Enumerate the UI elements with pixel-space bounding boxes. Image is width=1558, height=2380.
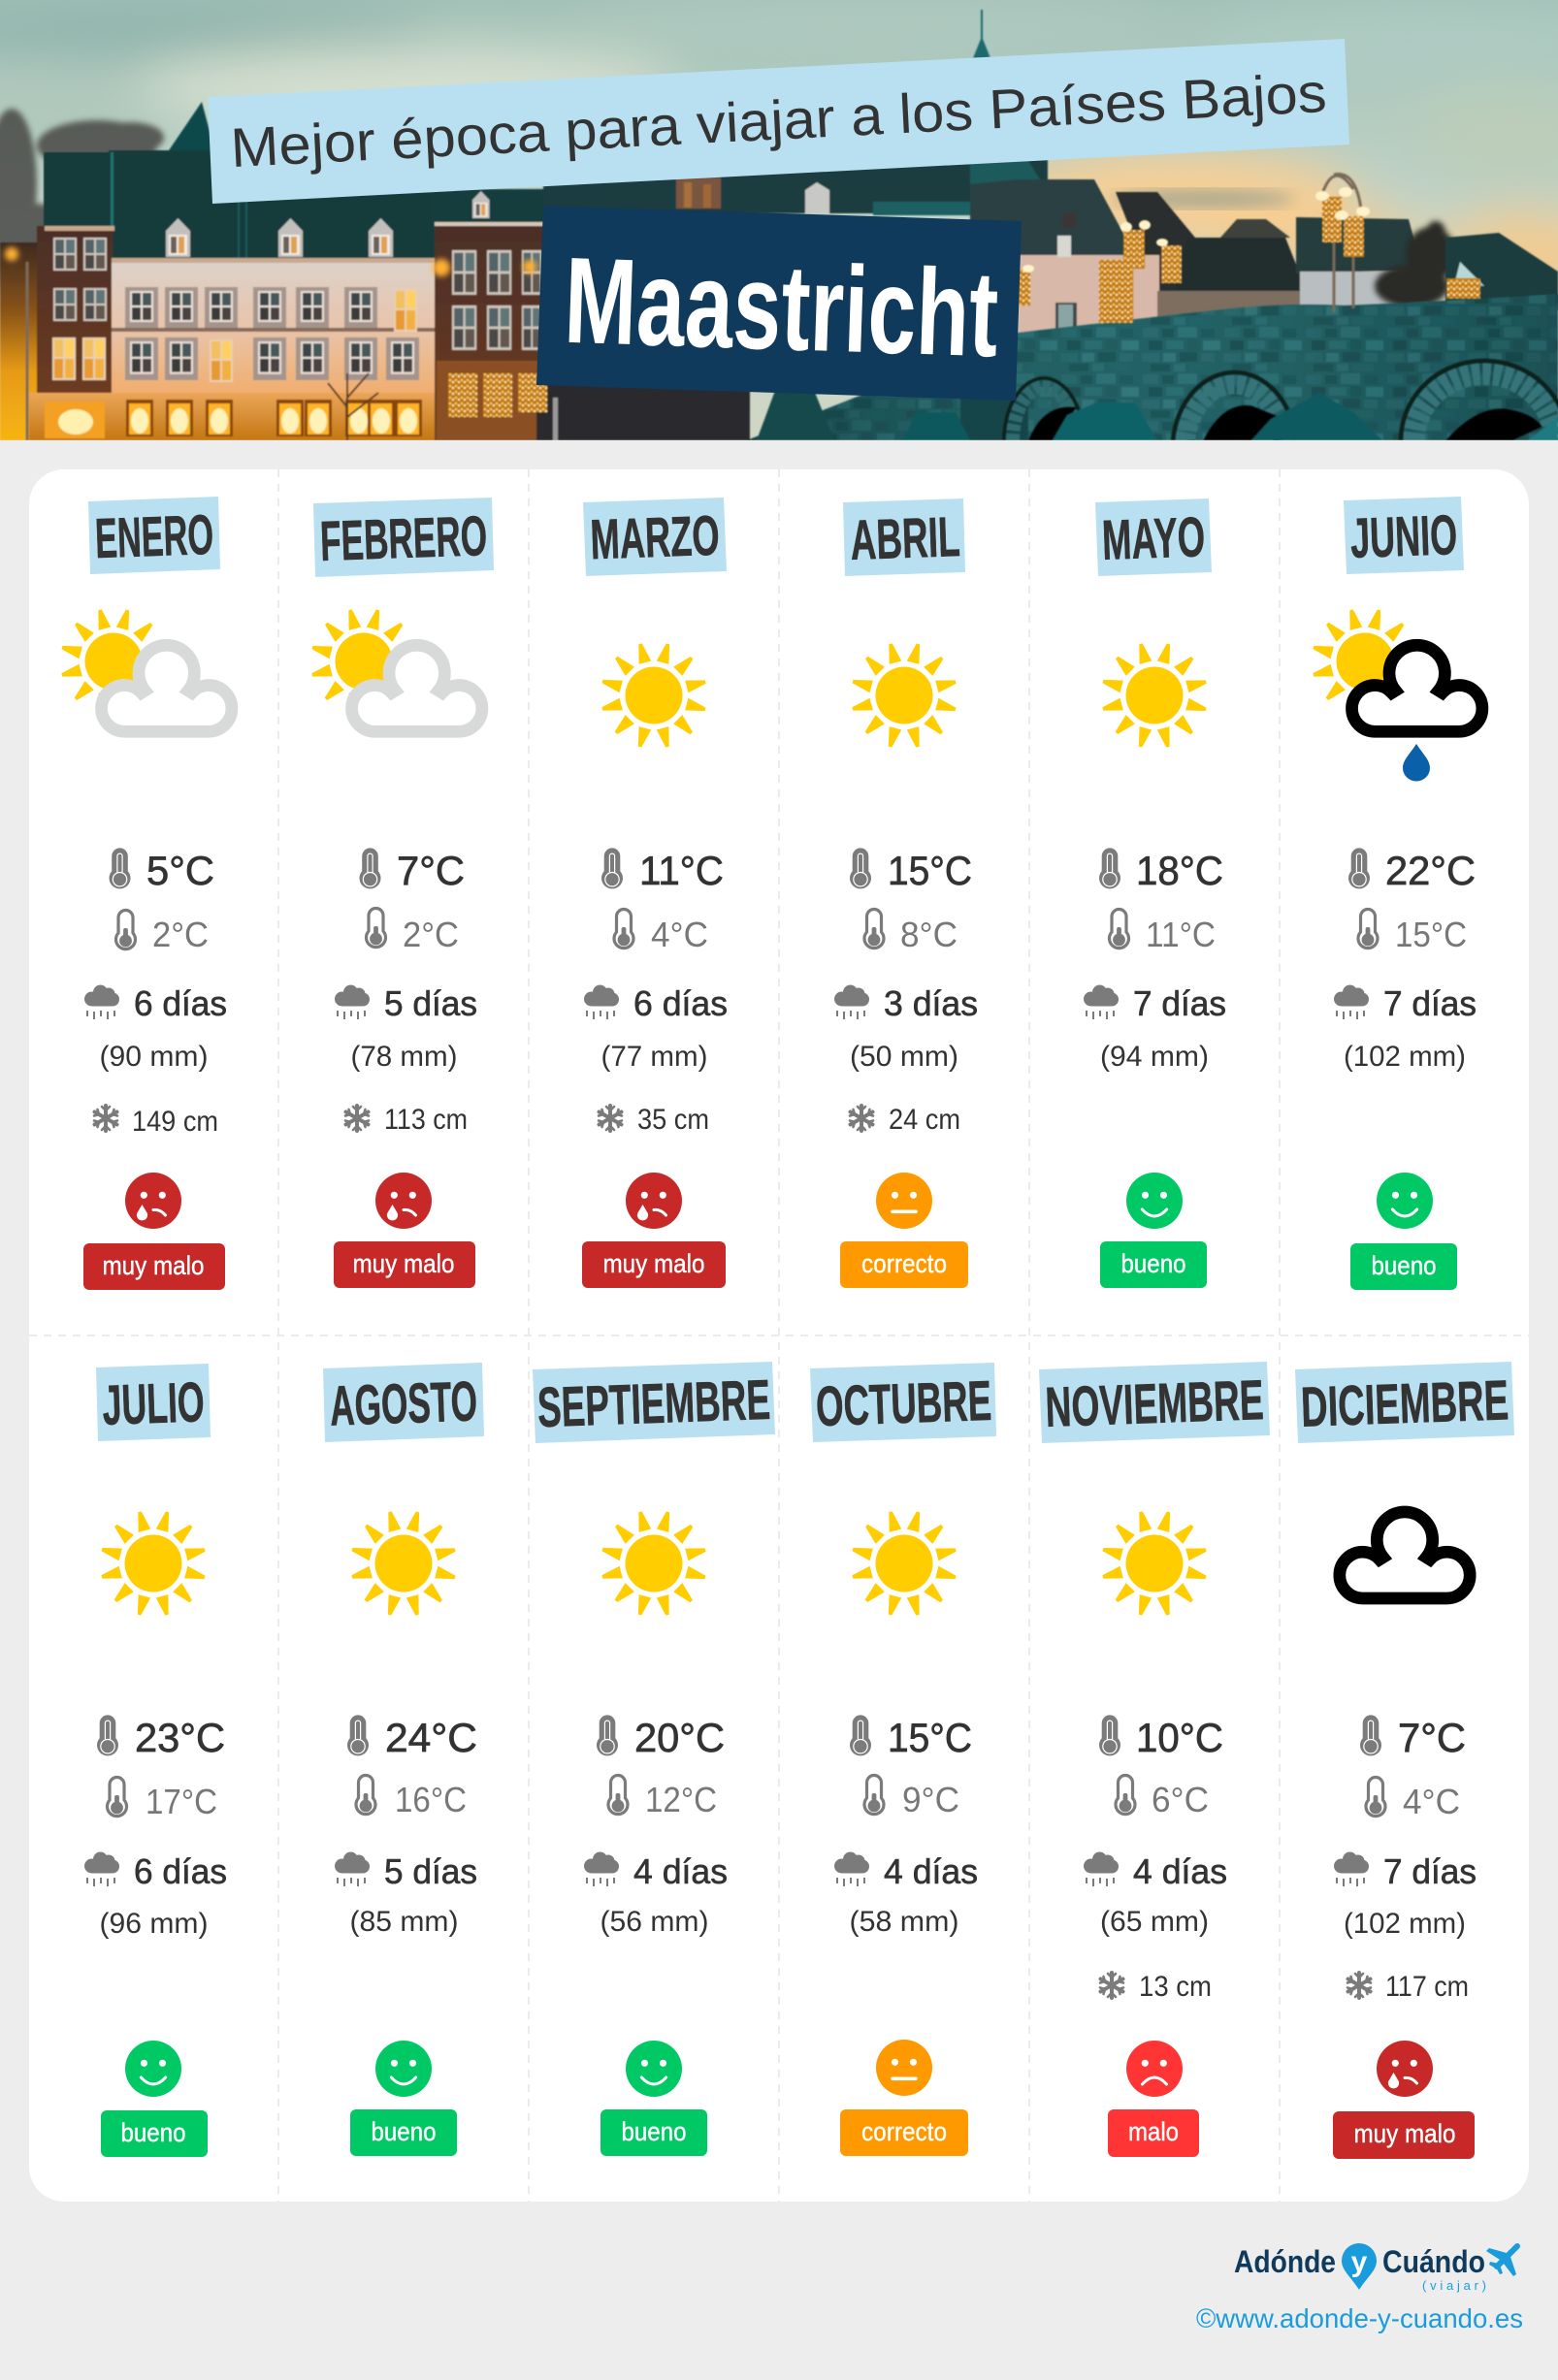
rating: bueno: bueno <box>1121 1249 1185 1278</box>
snow depth: 117 cm <box>1385 1971 1469 2003</box>
low temperature <box>1366 1777 1460 1821</box>
low temperature <box>608 1775 717 1819</box>
rainy days <box>1334 1851 1477 1891</box>
snow depth <box>345 1104 468 1136</box>
low temperature: 17°C <box>146 1782 217 1821</box>
rainfall: (78 mm) <box>351 1041 458 1073</box>
low temperature: 6°C <box>1152 1780 1209 1819</box>
month label: marzo: MARZO <box>589 504 721 571</box>
low temperature: 4°C <box>651 915 708 954</box>
logo: Adónde y Cuándo: (viajar) <box>1422 2278 1486 2293</box>
rainfall: (96 mm) <box>99 1908 208 1940</box>
rating: bueno <box>1350 1173 1457 1290</box>
high temperature <box>1360 1715 1466 1760</box>
panel: enero <box>60 497 232 1290</box>
rainy days: 5 días <box>384 1851 477 1891</box>
logo: Adónde y Cuándo: Cuándo <box>1382 2244 1485 2279</box>
high temperature <box>1099 848 1223 893</box>
low temperature: 8°C <box>900 915 958 954</box>
month label: junio: JUNIO <box>1349 503 1458 570</box>
icon: sun, black cloud and raindrop <box>1312 608 1482 782</box>
month label: febrero <box>313 498 494 577</box>
rainfall: (102 mm) <box>1344 1041 1466 1073</box>
rainfall: (94 mm) <box>1100 1041 1209 1073</box>
panel: noviembre <box>1039 1362 1270 2157</box>
rating: muy malo: muy malo <box>103 1251 204 1280</box>
tree <box>0 105 168 288</box>
rainfall: (77 mm) <box>601 1041 708 1073</box>
high temperature <box>601 848 724 893</box>
rainy days: 4 días <box>884 1851 978 1891</box>
rainfall: (85 mm) <box>349 1906 458 1938</box>
rainy days <box>584 983 728 1023</box>
rainy days: 3 días <box>884 983 978 1023</box>
high temperature: 23°C <box>135 1715 225 1760</box>
low temperature <box>116 910 209 954</box>
logo: Adónde y Cuándo: Adónde <box>1234 2244 1336 2279</box>
icon: sun <box>600 1510 707 1617</box>
month label: mayo <box>1095 499 1212 576</box>
low temperature <box>1358 910 1467 954</box>
rating: muy malo: muy malo <box>603 1249 704 1278</box>
icon: sun and grey cloud <box>310 608 482 731</box>
high temperature: 11°C <box>639 848 724 893</box>
rainy days: 6 días <box>134 1851 227 1891</box>
month label: octubre <box>810 1363 996 1442</box>
rainy days <box>834 1851 978 1891</box>
rainy days: 7 días <box>1133 983 1226 1023</box>
snow depth <box>1347 1971 1469 2003</box>
rating: muy malo <box>334 1173 475 1288</box>
panel: mayo <box>1084 499 1226 1288</box>
panel: julio <box>84 1364 227 2157</box>
rating: bueno <box>600 2041 707 2156</box>
month label: junio <box>1344 497 1464 574</box>
panel: febrero <box>310 498 494 1288</box>
rating: bueno <box>1100 1173 1207 1288</box>
low temperature <box>1116 1775 1209 1819</box>
low temperature: 16°C <box>395 1780 467 1819</box>
panel: calendar card <box>29 469 1529 2202</box>
month label: abril: ABRIL <box>849 505 961 572</box>
icon: airplane <box>1486 2246 1517 2276</box>
month label: julio: JULIO <box>101 1370 206 1437</box>
subtitle banner <box>208 39 1349 204</box>
rating: bueno <box>101 2041 208 2157</box>
rating: correcto: correcto <box>861 1249 947 1278</box>
logo: Adónde y Cuándo <box>1234 2243 1517 2293</box>
rating: bueno <box>350 2041 457 2156</box>
rainfall: (50 mm) <box>850 1041 958 1073</box>
rating: muy malo: muy malo <box>353 1249 454 1278</box>
low temperature: 12°C <box>645 1780 717 1819</box>
low temperature: 9°C <box>902 1780 959 1819</box>
rainy days: 6 días <box>633 983 728 1023</box>
snow depth: 13 cm <box>1139 1971 1212 2003</box>
rating: bueno: bueno <box>1372 1251 1436 1280</box>
high temperature: 24°C <box>385 1715 477 1760</box>
snow depth <box>1100 1971 1212 2003</box>
distant spire <box>973 10 990 58</box>
month label: octubre: OCTUBRE <box>815 1369 992 1438</box>
high temperature <box>1099 1715 1223 1760</box>
rainy days <box>1084 1851 1227 1891</box>
rating: bueno: bueno <box>120 2118 186 2147</box>
snow depth <box>599 1104 709 1136</box>
rainy days: 6 días <box>134 983 227 1023</box>
title: Maastricht: Maastricht <box>563 232 1000 382</box>
rainy days: 5 días <box>384 983 477 1023</box>
high temperature: 7°C <box>397 848 465 893</box>
high temperature <box>850 1715 972 1760</box>
rating: correcto: correcto <box>861 2117 947 2146</box>
month label: agosto: AGOSTO <box>329 1369 478 1438</box>
rainy days <box>834 983 978 1023</box>
low temperature: 2°C <box>152 915 209 954</box>
rainy days: 7 días <box>1383 983 1477 1023</box>
rainy days <box>335 983 477 1023</box>
rainfall: (90 mm) <box>99 1041 208 1073</box>
snow depth <box>850 1104 960 1136</box>
high temperature <box>850 848 972 893</box>
rainy days <box>84 1851 227 1891</box>
panel: octubre <box>810 1363 996 2156</box>
panel: junio <box>1312 497 1482 1290</box>
icon: sun and grey cloud <box>60 608 232 731</box>
title: Maastricht <box>536 206 1022 401</box>
low temperature <box>864 1775 959 1819</box>
icon: sun <box>100 1510 207 1617</box>
month label: septiembre <box>533 1362 775 1443</box>
panel: septiembre <box>533 1362 775 2156</box>
high temperature <box>109 848 214 893</box>
month label: abril <box>843 499 965 576</box>
bridge <box>747 294 1558 440</box>
rainy days <box>84 983 227 1023</box>
high temperature: 15°C <box>888 1715 972 1760</box>
month label: febrero: FEBRERO <box>319 504 488 573</box>
panel: agosto <box>323 1363 484 2156</box>
rating: muy malo <box>582 1173 726 1288</box>
month label: mayo: MAYO <box>1101 505 1206 572</box>
header photo: Maastricht at dusk <box>0 0 1558 440</box>
rating: bueno: bueno <box>621 2117 687 2146</box>
rating: muy malo: muy malo <box>1354 2119 1455 2148</box>
low temperature: 2°C <box>403 915 459 954</box>
rainfall: (58 mm) <box>850 1906 958 1938</box>
rating: muy malo <box>83 1173 225 1290</box>
low temperature <box>864 910 958 954</box>
low temperature: 11°C <box>1146 915 1216 954</box>
month label: enero <box>88 497 220 574</box>
icon: sun <box>1101 1510 1208 1617</box>
rating: malo: malo <box>1128 2117 1179 2146</box>
low temperature <box>356 1775 467 1819</box>
rating: bueno: bueno <box>371 2117 437 2146</box>
high temperature: 15°C <box>888 848 972 893</box>
high temperature: 18°C <box>1136 848 1223 893</box>
panel: diciembre <box>1295 1362 1514 2159</box>
icon: sun <box>600 642 707 749</box>
rainy days <box>1334 983 1477 1023</box>
month label: noviembre: NOVIEMBRE <box>1044 1368 1265 1439</box>
high temperature <box>359 848 465 893</box>
low temperature: 15°C <box>1395 915 1467 954</box>
website url: ©www.adonde-y-cuando.es <box>1196 2303 1523 2333</box>
low temperature <box>614 910 708 954</box>
icon: sun <box>350 1510 457 1617</box>
rainy days: 7 días <box>1383 1851 1477 1891</box>
month label: marzo <box>583 498 727 576</box>
month label: noviembre <box>1039 1362 1270 1443</box>
month label: enero: ENERO <box>94 503 214 570</box>
rating: correcto <box>840 1173 968 1288</box>
right houses <box>969 178 1124 256</box>
rainfall: (102 mm) <box>1344 1908 1466 1940</box>
lamp posts and string lights <box>1019 175 1480 323</box>
icon: map pin <box>1342 2243 1377 2290</box>
icon: sun <box>1101 642 1208 749</box>
high temperature: 10°C <box>1136 1715 1223 1760</box>
subtitle banner: Mejor época para viajar a los Países Bajos <box>229 62 1328 179</box>
rainy days: 4 días <box>1133 1851 1227 1891</box>
low temperature <box>107 1777 217 1821</box>
icon: map pin: y <box>1351 2246 1368 2278</box>
month label: septiembre: SEPTIEMBRE <box>536 1368 771 1439</box>
month label: agosto <box>323 1363 484 1442</box>
month label: julio <box>96 1364 211 1441</box>
rainfall: (65 mm) <box>1100 1906 1209 1938</box>
high temperature: 20°C <box>634 1715 725 1760</box>
snow depth: 24 cm <box>889 1104 960 1136</box>
rating: correcto <box>840 2040 968 2156</box>
snow depth: 113 cm <box>384 1104 468 1136</box>
snow depth: 149 cm <box>132 1106 218 1138</box>
rainy days <box>1084 983 1226 1023</box>
rating: malo <box>1108 2041 1199 2157</box>
panel: marzo <box>582 498 728 1288</box>
high temperature: 7°C <box>1398 1715 1466 1760</box>
low temperature: 4°C <box>1403 1782 1460 1821</box>
snow depth <box>94 1106 218 1138</box>
high temperature: 22°C <box>1385 848 1476 893</box>
rainy days <box>584 1851 728 1891</box>
low temperature <box>1110 910 1216 954</box>
low temperature <box>367 908 459 954</box>
snow depth: 35 cm <box>637 1104 709 1136</box>
rating: muy malo <box>1333 2041 1475 2159</box>
panel: abril <box>834 499 978 1288</box>
icon: black cloud <box>1340 1512 1470 1598</box>
icon: sun <box>851 1510 958 1617</box>
rainfall: (56 mm) <box>600 1906 708 1938</box>
high temperature: 5°C <box>146 848 214 893</box>
icon: sun <box>851 642 958 749</box>
rainy days: 4 días <box>633 1851 728 1891</box>
rainy days <box>335 1851 477 1891</box>
